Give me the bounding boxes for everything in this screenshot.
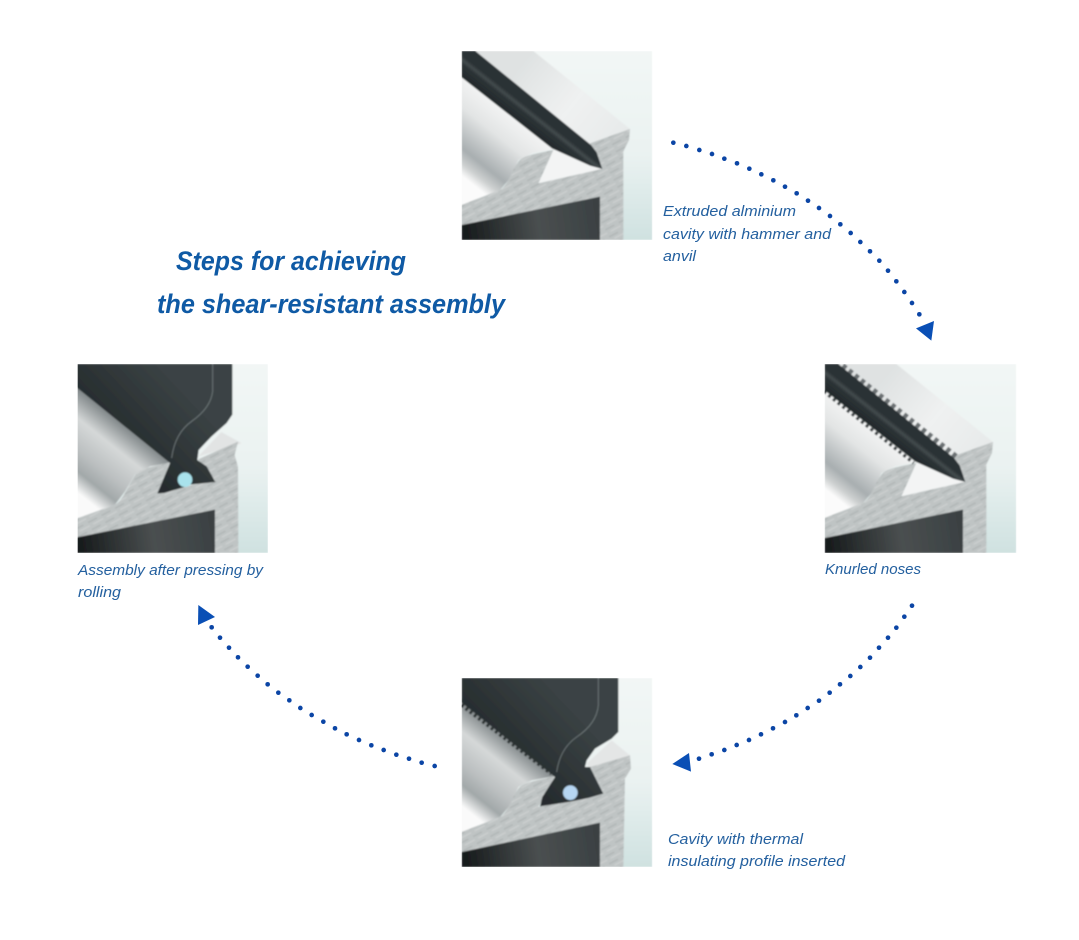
panel: step 4 assembly after rolling (77, 364, 268, 553)
caption: step 1 (663, 203, 832, 265)
insulating wire (563, 785, 578, 800)
title: Steps for achieving (176, 246, 406, 276)
arrow: step 3 to step 4 (198, 605, 437, 768)
caption: step 4: Assembly after pressing by (77, 562, 265, 579)
caption: step 3: Cavity with thermal (668, 831, 804, 848)
insulating wire (178, 472, 192, 487)
caption: step 1: Extruded alminium (663, 203, 796, 220)
caption: step 1: cavity with hammer and (663, 226, 832, 243)
panel: step 3 cavity with thermal insulating profile (462, 678, 652, 867)
caption: step 3 (668, 831, 846, 870)
panel: step 2 knurled noses (824, 364, 1016, 553)
caption: step 1: anvil (663, 248, 697, 265)
caption: step 4: rolling (78, 584, 122, 601)
infographic canvas (77, 51, 1016, 869)
caption: step 3: insulating profile inserted (668, 853, 846, 870)
caption: step 2: Knurled noses (825, 561, 921, 578)
title: the shear-resistant assembly (157, 289, 507, 319)
arrow: step 1 to step 2 (671, 140, 934, 341)
caption: step 4 (77, 562, 265, 601)
panel: step 1 extruded cavity (462, 51, 652, 240)
arrow: step 2 to step 3 (672, 603, 914, 772)
title (157, 246, 507, 319)
